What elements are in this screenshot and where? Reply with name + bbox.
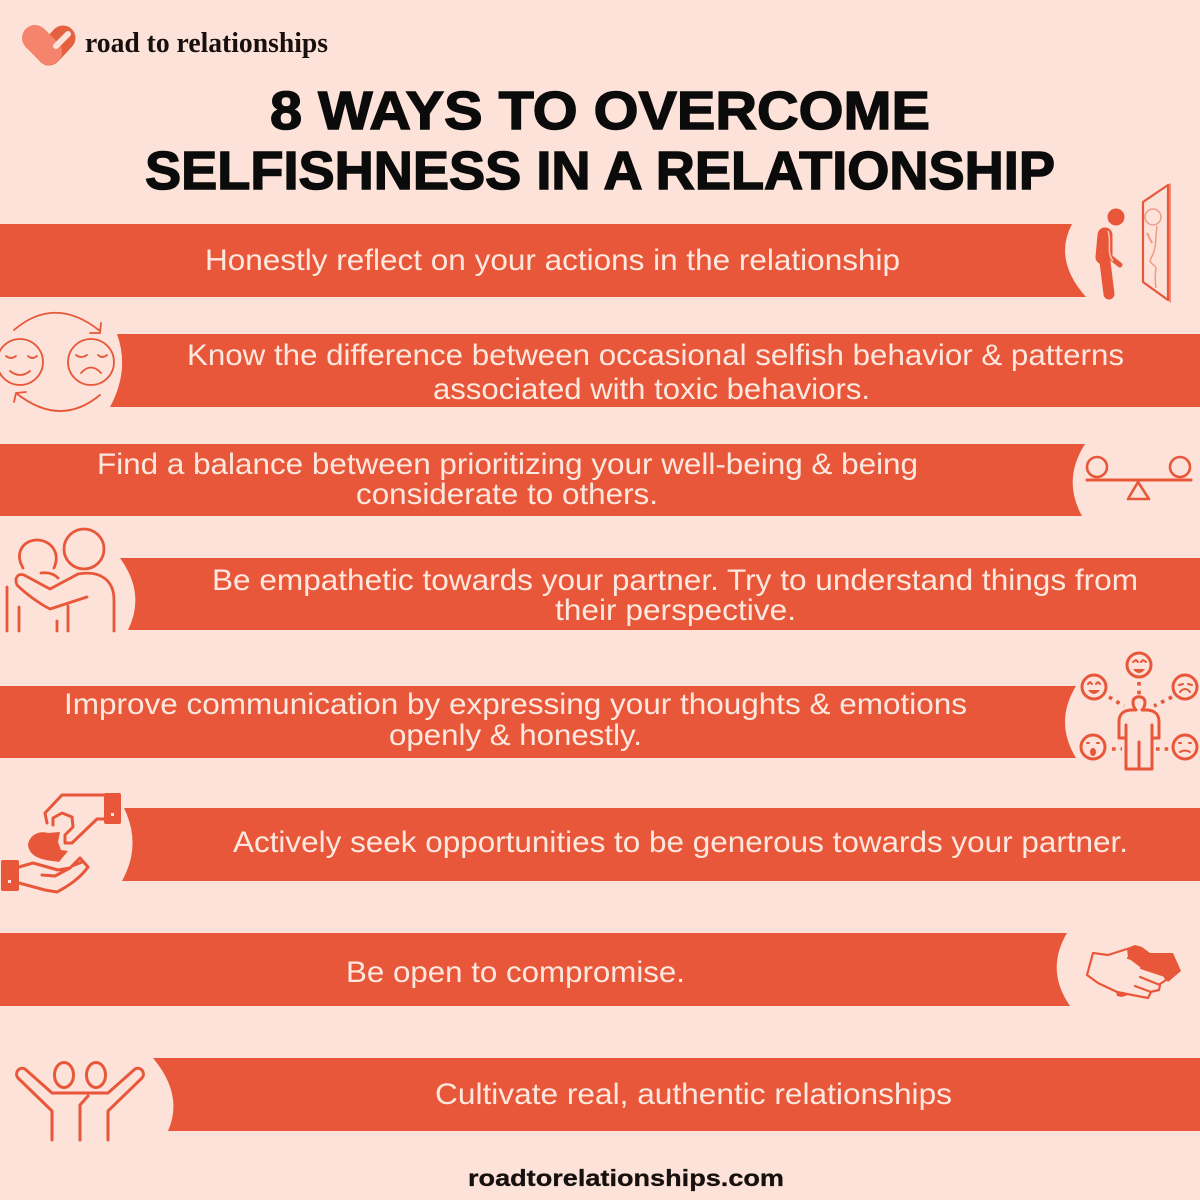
text 4: their perspective. [555,594,796,627]
text 4: Be empathetic towards your partner. Try to understand things from [212,564,1138,597]
text 5: Improve communication by expressing your thoughts & emotions [64,688,967,721]
text 2: associated with toxic behaviors. [433,373,870,406]
title: SELFISHNESS IN A RELATIONSHIP [145,141,1055,201]
panel: tip 6 generosity [1,793,1200,892]
text 1: Honestly reflect on your actions in the relationship [205,244,900,277]
text 8: Cultivate real, authentic relationships [435,1078,952,1111]
title: 8 WAYS TO OVERCOME [270,81,930,141]
text 2: Know the difference between occasional selfish behavior & patterns [187,339,1124,372]
panel: tip 7 compromise [0,933,1181,1006]
panel: tip 1 reflect [0,184,1170,302]
text 3: Find a balance between prioritizing your well-being & being [97,448,918,481]
icon: person facing mirror [1103,184,1170,302]
text 7: Be open to compromise. [346,956,685,989]
footer url: roadtorelationships.com [468,1165,784,1191]
logo wordmark: road to relationships [85,28,328,59]
text 5: openly & honestly. [389,719,642,752]
icon: balance seesaw [1087,457,1191,499]
icon: two people arms raised [17,1062,143,1140]
text 3: considerate to others. [356,478,658,511]
logo [35,28,328,59]
text 3 [97,448,918,511]
banner 1 [0,224,1086,297]
panel: tip 3 balance [0,444,1191,516]
banner 6 [122,808,1200,881]
banner 3 [0,444,1085,516]
text 2 [187,339,1124,406]
icon: handshake [1087,945,1181,998]
panel: tip 4 empathy [7,529,1200,631]
icon: two people hugging [7,529,114,631]
icon: hands giving apple [1,793,121,892]
text 5 [64,688,967,752]
banner 4 [120,558,1200,630]
panel: tip 5 communication [0,653,1197,769]
icon: person with emotions [1081,653,1197,769]
icon: heart logo [35,34,68,53]
panel: tip 2 difference [0,313,1200,411]
banner 5 [0,686,1076,758]
title [145,81,1055,201]
panel: tip 8 authentic relationships [17,1058,1200,1140]
banner 2 [110,334,1200,407]
icon: happy and sad faces cycle [0,313,114,411]
text 4 [212,564,1138,627]
banner 8 [153,1058,1200,1131]
text 6: Actively seek opportunities to be generous towards your partner. [233,826,1128,859]
banner 7 [0,933,1070,1006]
